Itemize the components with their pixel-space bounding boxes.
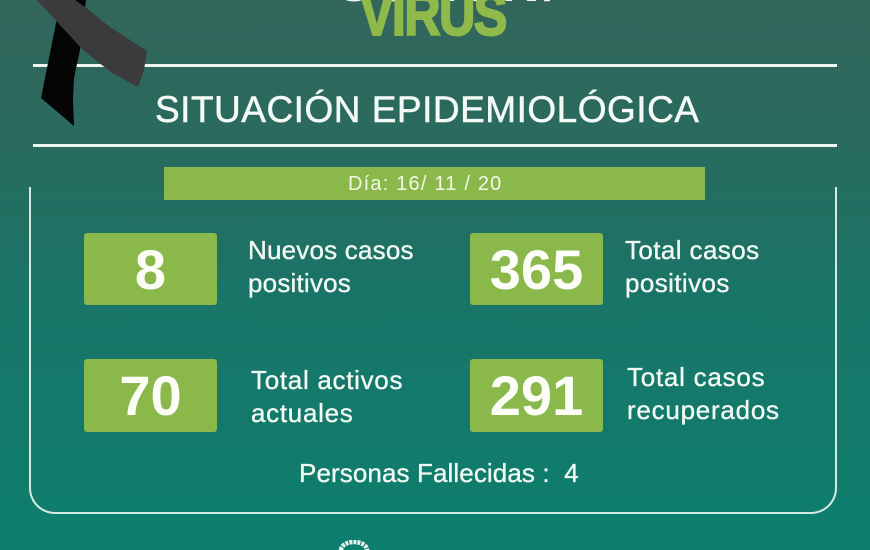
panel: statistics frame <box>29 187 837 514</box>
stat: recovered cases label: recuperados <box>627 395 780 425</box>
stat: active cases label: actuales <box>251 398 353 428</box>
stat: total positive cases label <box>625 235 759 298</box>
stat: active cases value: 70 <box>119 364 182 427</box>
stat: total positive cases value <box>470 233 603 305</box>
stat: new positive cases label <box>248 235 414 298</box>
stat: active cases label <box>251 365 403 428</box>
stat: active cases label: Total activos <box>251 365 403 395</box>
icon: municipal emblem, partial <box>338 540 370 550</box>
stat: total positive cases value: 365 <box>490 238 583 301</box>
stat: active cases value <box>84 359 217 432</box>
stat: new positive cases label: positivos <box>248 268 351 298</box>
stat: total positive cases label: Total casos <box>625 235 759 265</box>
stat: new positive cases value: 8 <box>135 238 166 301</box>
icon: black mourning ribbon <box>37 0 147 126</box>
stat: total positive cases label: positivos <box>625 268 730 298</box>
title: SITUACIÓN EPIDEMIOLÓGICA <box>155 89 699 130</box>
stat: recovered cases label <box>627 362 780 425</box>
stat: recovered cases value <box>470 359 603 432</box>
date banner <box>164 167 705 200</box>
stat: recovered cases label: Total casos <box>627 362 765 392</box>
deaths count: Personas Fallecidas : 4 <box>299 458 579 488</box>
bottom title divider line <box>33 144 837 147</box>
top divider line <box>33 64 837 67</box>
stat: new positive cases label: Nuevos casos <box>248 235 414 265</box>
date banner: Día: 16/ 11 / 20 <box>348 173 502 195</box>
stat: new positive cases value <box>84 233 217 305</box>
stat: recovered cases value: 291 <box>490 364 583 427</box>
